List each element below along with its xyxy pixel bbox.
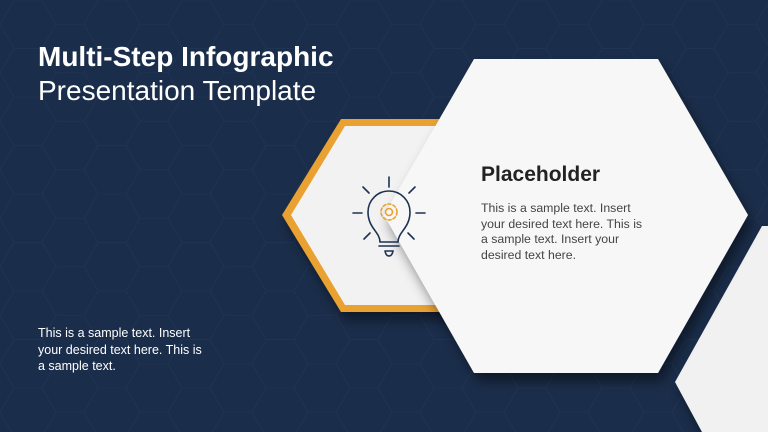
hexagon: orange icon hexagon xyxy=(282,119,480,312)
title: Multi-Step Infographic xyxy=(38,41,334,72)
panel text: This is a sample text. Insert your desired text here. This is a sample text. Insert your desired text here. xyxy=(481,201,642,262)
panel heading: Placeholder xyxy=(481,163,600,186)
title xyxy=(38,41,334,106)
icon: lightbulb with gear xyxy=(353,177,425,256)
title: Presentation Template xyxy=(38,75,316,106)
hexagon: partial bottom right xyxy=(675,226,768,432)
bottom-left text: This is a sample text. Insert your desired text here. This is a sample text. xyxy=(38,326,202,373)
hexagon: main white panel xyxy=(384,59,748,373)
